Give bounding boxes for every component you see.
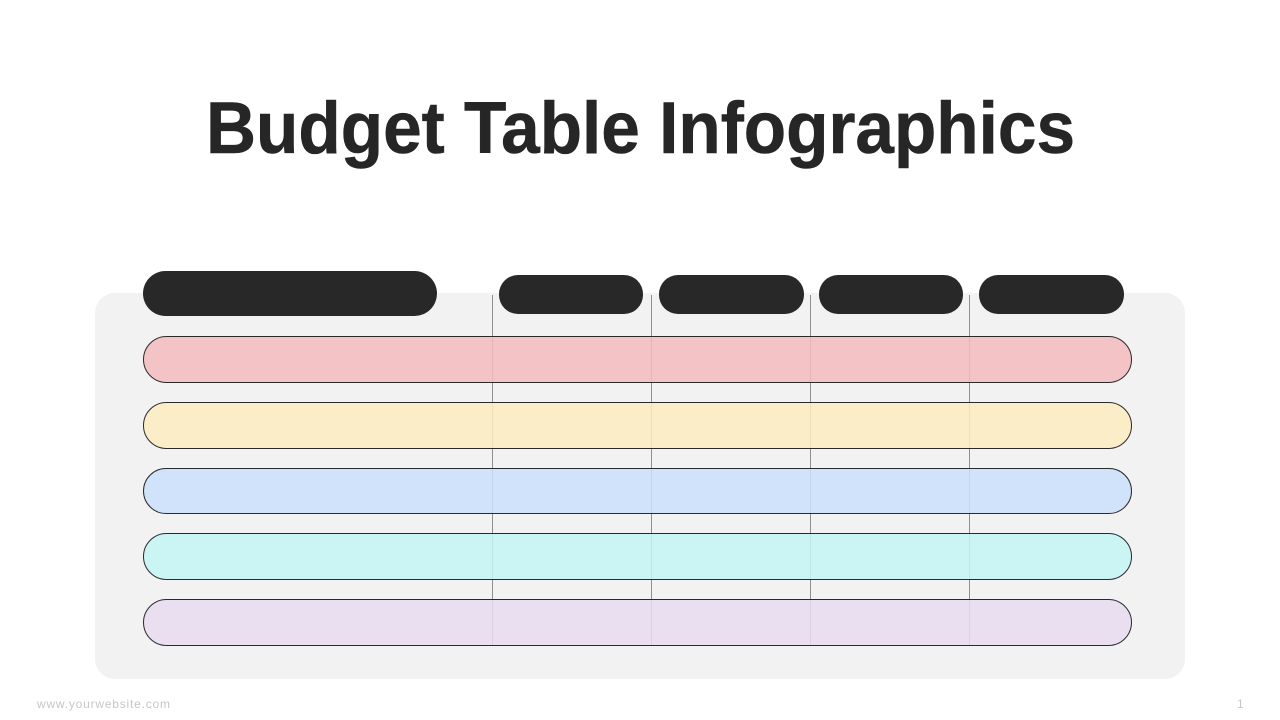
row 3: blue <box>144 468 1132 514</box>
header pill: column 3 <box>819 275 963 314</box>
page number: 1 <box>1237 697 1244 711</box>
column dividers <box>492 295 970 645</box>
header pill: column 2 <box>659 275 804 314</box>
row 4: teal <box>144 534 1132 580</box>
table rows <box>144 336 1132 646</box>
table header pills <box>143 271 1124 316</box>
header pill: item column <box>143 271 437 316</box>
header pill: column 1 <box>499 275 643 314</box>
row 1: pink <box>144 336 1132 382</box>
row 2: yellow <box>144 402 1132 448</box>
header pill: column 4 <box>979 275 1124 314</box>
row 5: lavender <box>144 600 1132 646</box>
panel: table background <box>95 293 1185 679</box>
footer website: www.yourwebsite.com <box>36 697 170 711</box>
title: Budget Table Infographics <box>206 88 1075 169</box>
